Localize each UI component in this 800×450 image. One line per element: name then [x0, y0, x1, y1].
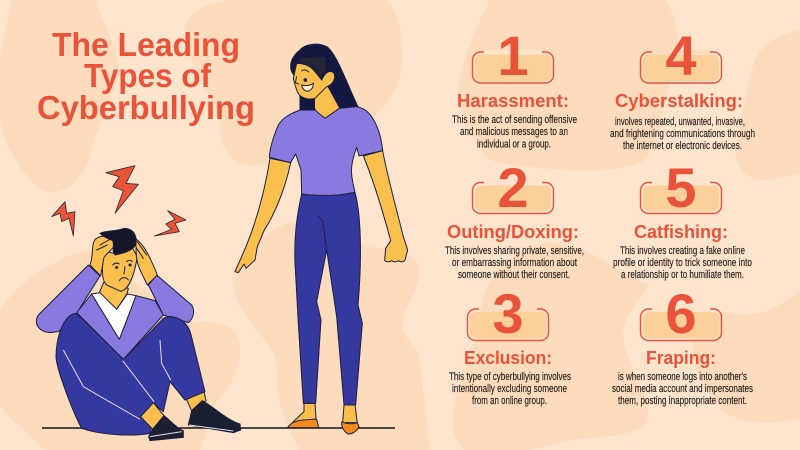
description: individual or a group.: [477, 138, 551, 150]
description: [452, 114, 577, 150]
description: the internet or electronic devices.: [623, 140, 742, 152]
number badge 4: 4: [665, 24, 697, 87]
illustration: distressed seated man: [36, 166, 241, 441]
title: Types of: [84, 57, 212, 94]
item 2: outing/doxing: [445, 156, 584, 281]
icon: lightning bolts: [52, 166, 186, 236]
item 4: cyberstalking: [610, 24, 755, 152]
description: [612, 371, 753, 407]
item 5: catfishing: [613, 156, 752, 281]
description: [445, 245, 584, 281]
number badge 6: 6: [665, 282, 697, 345]
number badge 4: [640, 24, 722, 87]
heading: Harassment:: [457, 91, 569, 111]
description: [613, 245, 752, 281]
item 6: fraping: [612, 282, 753, 407]
illustration: standing woman pointing: [235, 44, 408, 434]
description: This type of cyberbullying involves: [449, 371, 571, 383]
description: This involves creating a fake online: [620, 245, 745, 257]
description: involves repeated, unwanted, invasive,: [615, 116, 745, 128]
number badge 2: 2: [497, 156, 529, 219]
description: social media account and impersonates: [612, 383, 753, 395]
heading: Fraping:: [646, 348, 716, 368]
description: [449, 371, 571, 407]
description: someone without their consent.: [458, 269, 570, 281]
number badge 6: [640, 282, 722, 345]
description: a relationship or to humiliate them.: [621, 269, 744, 281]
ground line: [42, 427, 395, 429]
number badge 3: 3: [492, 282, 524, 345]
description: from an online group.: [472, 395, 547, 407]
description: intentionally excluding someone: [452, 383, 567, 395]
item 3: exclusion: [449, 282, 571, 407]
item 1: harassment: [452, 24, 577, 150]
heading: Cyberstalking:: [615, 91, 743, 111]
title: Cyberbullying: [37, 89, 255, 126]
description: or embarrassing information about: [452, 257, 577, 269]
description: and frightening communications through: [610, 128, 755, 140]
description: This is the act of sending offensive: [452, 114, 577, 126]
heading: Exclusion:: [464, 348, 552, 368]
number badge 1: 1: [497, 24, 529, 87]
description: This involves sharing private, sensitive,: [445, 245, 584, 257]
description: them, posting inappropriate content.: [618, 395, 747, 407]
description: and malicious messages to an: [460, 126, 568, 138]
heading: Catfishing:: [634, 222, 728, 242]
description: profile or identity to trick someone into: [613, 257, 752, 269]
title: [37, 26, 255, 126]
title: The Leading: [52, 26, 240, 63]
description: is when someone logs into another's: [618, 371, 747, 383]
description: [610, 116, 755, 152]
heading: Outing/Doxing:: [447, 222, 579, 242]
number badge 5: 5: [665, 156, 697, 219]
